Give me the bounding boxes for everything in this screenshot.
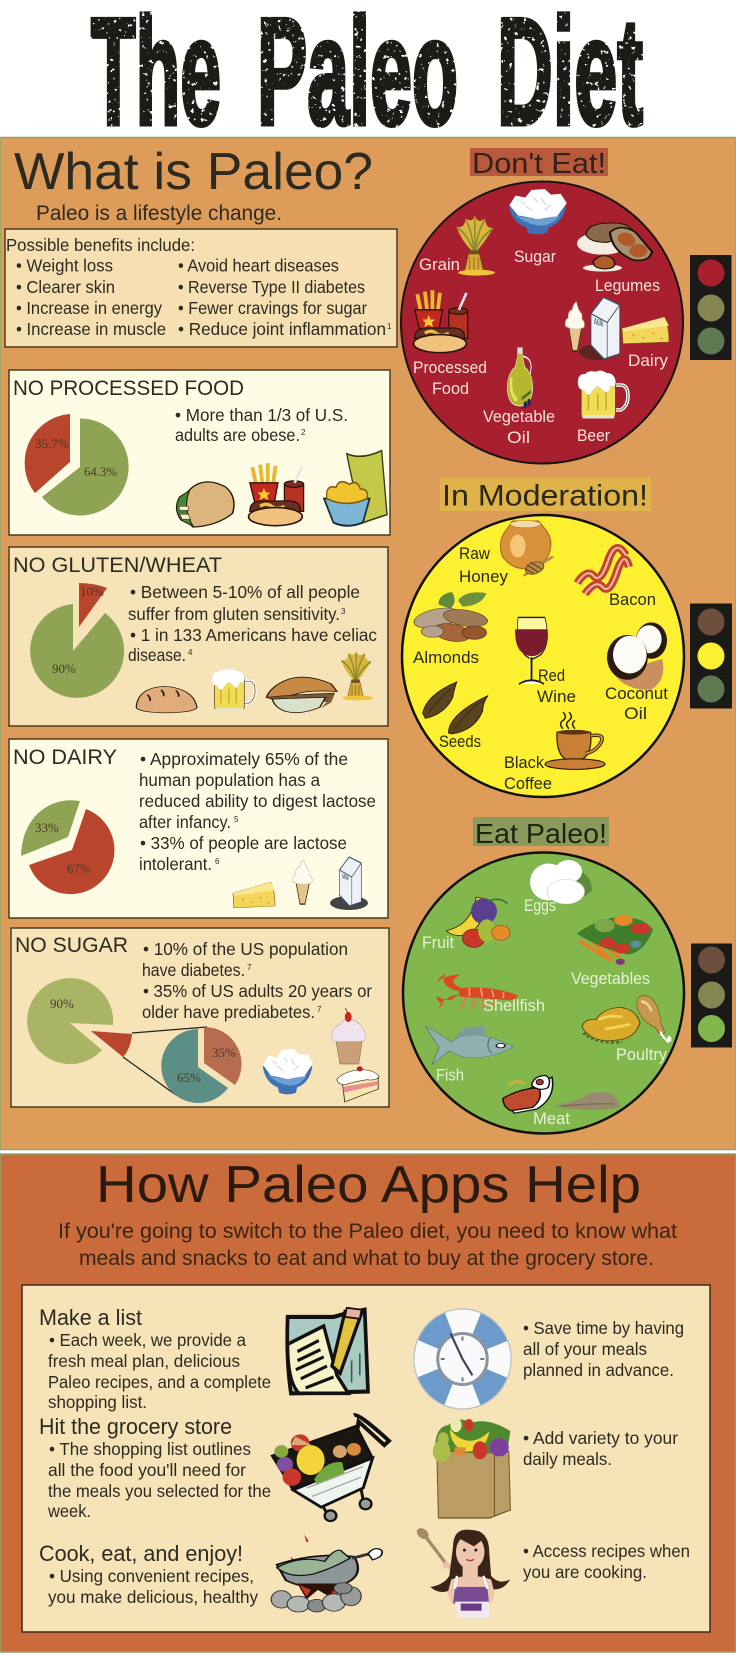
labels: don't eat foods: Vegetable (483, 407, 555, 426)
icon: roast (553, 1092, 620, 1110)
icon: steak (503, 1075, 553, 1113)
traffic light: yellow (690, 604, 732, 708)
pie chart: gluten (30, 583, 124, 698)
text: dairy stats: reduced ability to digest lactose (139, 791, 376, 811)
labels: moderation foods (413, 544, 668, 793)
icon: milk (330, 857, 368, 910)
labels: don't eat foods: Sugar (514, 247, 556, 266)
icon: honey pot (500, 521, 553, 577)
heading: no gluten wheat: NO GLUTEN/WHEAT (13, 554, 222, 577)
labels: paleo foods: Eggs (524, 896, 556, 915)
text: dairy stats: 5 (234, 815, 239, 824)
labels: don't eat foods: Grain (419, 255, 460, 274)
circle: don't eat foods (401, 182, 683, 464)
icon: sugar bowl (263, 1049, 313, 1094)
panel: possible benefits: • Fewer cravings for sugar (178, 298, 367, 318)
pie chart: dairy: 67% (67, 861, 91, 876)
text: gluten stats: 4 (188, 648, 193, 657)
text: gluten stats: • Between 5-10% of all people (130, 582, 360, 602)
panel: how paleo apps help (0, 1154, 736, 1652)
icon: legumes (577, 223, 652, 272)
circle: paleo foods (403, 852, 684, 1134)
icon: fast food (414, 290, 468, 353)
text: access recipes (523, 1541, 690, 1582)
pie chart: sugar: 35% (212, 1045, 236, 1060)
icon: fast food (249, 463, 304, 526)
step: cook, eat, and enjoy: you make delicious, healthy (48, 1587, 258, 1607)
icon: almonds (410, 592, 490, 645)
icon: coconut (607, 622, 667, 690)
icon: chips (324, 451, 387, 526)
labels: moderation foods: Coffee (504, 774, 552, 793)
text: add variety: • Add variety to your (523, 1428, 678, 1448)
icon: seeds (423, 682, 488, 734)
icon: pan over fire (271, 1535, 382, 1612)
panel: possible benefits: Possible benefits include: (6, 235, 195, 255)
text: obesity stat: • More than 1/3 of U.S. (175, 405, 348, 425)
labels: paleo foods: Shellfish (483, 996, 545, 1015)
icon: ice cream (292, 860, 312, 904)
step: hit the grocery store: week. (47, 1501, 91, 1521)
panel: possible benefits: • Avoid heart diseases (178, 256, 339, 276)
traffic light: green (691, 944, 732, 1048)
text: sugar stats: • 10% of the US population (143, 939, 348, 959)
text: gluten stats: suffer from gluten sensitivity. (128, 604, 340, 624)
heading: how paleo apps help: How Paleo Apps Help (96, 1156, 641, 1214)
panel: no sugar (11, 928, 389, 1107)
text: intro: If you're going to switch to the Paleo diet, you need to know what (58, 1220, 677, 1243)
heading: no dairy: NO DAIRY (13, 746, 117, 769)
text: add variety (523, 1428, 678, 1469)
step: make a list: • Each week, we provide a (49, 1330, 246, 1350)
panel: possible benefits: • Weight loss (16, 256, 113, 276)
text: gluten stats (128, 582, 377, 665)
text: add variety: daily meals. (523, 1449, 612, 1469)
icon: notepad and pencil (287, 1308, 368, 1393)
step: cook, eat, and enjoy: • Using convenient recipes, (49, 1566, 254, 1586)
labels: moderation foods: Bacon (609, 590, 656, 609)
panel: possible benefits: • Increase in energy (16, 298, 162, 318)
text: sugar stats: have diabetes. (142, 960, 245, 980)
labels: paleo foods: Meat (533, 1109, 570, 1128)
heading: in moderation: In Moderation! (442, 480, 648, 512)
pie chart: sugar (27, 978, 242, 1103)
icon: lobster (437, 973, 518, 1009)
icon: bacon (577, 548, 629, 594)
text: gluten stats: disease. (128, 645, 186, 665)
pie chart: sugar: 90% (50, 996, 74, 1011)
icon: chicken leg (637, 996, 671, 1043)
panel: possible benefits: • Clearer skin (16, 277, 115, 297)
icon: sugar bowl (509, 189, 567, 234)
heading: no processed food: NO PROCESSED FOOD (13, 377, 244, 400)
pie chart: sugar: 65% (177, 1070, 201, 1085)
icon: beer (578, 371, 628, 418)
labels: moderation foods: Honey (459, 567, 508, 586)
icon: life ring clock (414, 1309, 511, 1409)
step: hit the grocery store: all the food you'll need for (48, 1460, 246, 1480)
icon: shopping cart (272, 1415, 389, 1521)
labels: don't eat foods: Legumes (595, 276, 660, 295)
heading: don't eat: Don't Eat! (472, 148, 606, 180)
panel: no processed food (9, 370, 390, 535)
icon: oil (507, 348, 533, 408)
icon: coffee (545, 712, 605, 769)
icon: cake (337, 1066, 379, 1102)
step: hit the grocery store: Hit the grocery store (39, 1414, 232, 1439)
panel: possible benefits (5, 229, 397, 347)
labels: don't eat foods: Dairy (628, 351, 669, 370)
text: access recipes: • Access recipes when (523, 1541, 690, 1561)
icon: fruit (446, 897, 510, 947)
text: sugar stats: older have prediabetes. (142, 1002, 315, 1022)
panel: no dairy (9, 739, 388, 918)
step: hit the grocery store: the meals you selected for the (48, 1481, 271, 1501)
text: access recipes: you are cooking. (523, 1562, 647, 1582)
panel: possible benefits: • Reduce joint inflammation (178, 319, 386, 339)
step: make a list (39, 1305, 271, 1412)
labels: moderation foods: Raw (459, 544, 491, 563)
step: make a list: Paleo recipes, and a complete (48, 1372, 271, 1392)
labels: paleo foods: Fish (436, 1066, 464, 1084)
text: save time: • Save time by having (523, 1318, 684, 1338)
icon: vegetables (577, 915, 653, 965)
panel: possible benefits: • Reverse Type II diabetes (178, 277, 365, 297)
text: dairy stats: human population has a (139, 770, 320, 790)
text: obesity stat (175, 405, 348, 445)
labels: don't eat foods: Food (432, 379, 469, 398)
step: hit the grocery store (39, 1414, 271, 1521)
text: lifestyle change: Paleo is a lifestyle change. (36, 202, 282, 225)
text: sugar stats: 7 (317, 1005, 322, 1014)
icon: wine glass (515, 617, 547, 684)
text: save time: planned in advance. (523, 1360, 674, 1380)
text: dairy stats (139, 749, 376, 874)
icon: taco (176, 482, 234, 527)
text: save time: all of your meals (523, 1339, 647, 1359)
labels: don't eat foods (413, 247, 669, 447)
icon: cupcake (332, 1008, 366, 1064)
text: sugar stats: • 35% of US adults 20 years or (143, 981, 372, 1001)
labels: moderation foods: Almonds (413, 648, 479, 667)
step: make a list: fresh meal plan, delicious (48, 1351, 240, 1371)
labels: moderation foods: Wine (537, 687, 576, 706)
step: make a list: Make a list (39, 1305, 142, 1330)
labels: don't eat foods: Beer (577, 426, 610, 445)
pie chart: dairy (21, 800, 114, 894)
pie chart: gluten: 10% (80, 584, 104, 599)
labels: paleo foods (422, 896, 667, 1128)
text: intro: meals and snacks to eat and what to buy at the grocery store. (79, 1247, 654, 1270)
pie chart: processed food: 35.7% (35, 436, 69, 451)
heading: what is paleo: What is Paleo? (14, 143, 373, 201)
traffic light: red (690, 255, 732, 360)
text: dairy stats: intolerant. (139, 854, 212, 874)
labels: moderation foods: Oil (624, 704, 647, 723)
labels: moderation foods: Seeds (439, 732, 481, 751)
labels: paleo foods: Poultry (616, 1045, 667, 1064)
icon: fish (425, 1026, 513, 1065)
panel: how it works (22, 1285, 710, 1632)
labels: moderation foods: Coconut (605, 684, 668, 703)
text: gluten stats: 3 (341, 607, 346, 616)
icon: woman cooking (415, 1526, 510, 1618)
panel: possible benefits: 1 (387, 322, 392, 331)
panel: no gluten wheat (9, 547, 388, 726)
labels: paleo foods: Fruit (422, 933, 454, 952)
icon: wheat (341, 651, 373, 700)
text: gluten stats: • 1 in 133 Americans have celiac (130, 625, 377, 645)
icon: dairy (565, 297, 669, 360)
icon: chicken (582, 1007, 640, 1042)
text: dairy stats: 6 (215, 857, 220, 866)
step: cook, eat, and enjoy (39, 1541, 258, 1607)
labels: moderation foods: Red (538, 666, 565, 685)
icon: grocery bag (433, 1418, 510, 1518)
icon: beer (212, 669, 255, 711)
icon: cheese (233, 882, 275, 908)
pie chart: processed food (25, 414, 129, 515)
labels: don't eat foods: Oil (507, 428, 530, 447)
icon: bread (136, 686, 197, 713)
text: sugar stats: 7 (247, 963, 252, 972)
text: sugar stats (142, 939, 372, 1022)
panel: possible benefits: • Increase in muscle (16, 319, 166, 339)
circle: moderation foods (402, 515, 684, 797)
pie chart: processed food: 64.3% (84, 464, 117, 479)
heading: no sugar: NO SUGAR (15, 934, 128, 957)
text: dairy stats: • Approximately 65% of the (140, 749, 348, 769)
text: intro (58, 1220, 677, 1270)
icon: sandwich (266, 677, 337, 713)
text: obesity stat: 2 (301, 428, 306, 437)
text: obesity stat: adults are obese. (175, 425, 300, 445)
icon: eggs (530, 860, 592, 904)
icon: grain (456, 216, 495, 276)
text: dairy stats: after infancy. (139, 812, 231, 832)
title (0, 0, 736, 157)
labels: don't eat foods: Processed (413, 358, 487, 377)
step: hit the grocery store: • The shopping list outlines (49, 1439, 251, 1459)
text: save time (523, 1318, 684, 1380)
labels: moderation foods: Black (504, 753, 544, 772)
labels: paleo foods: Vegetables (571, 969, 650, 988)
pie chart: dairy: 33% (35, 820, 59, 835)
text: dairy stats: • 33% of people are lactose (140, 833, 347, 853)
step: cook, eat, and enjoy: Cook, eat, and enjoy! (39, 1541, 243, 1566)
step: make a list: shopping list. (48, 1392, 147, 1412)
pie chart: gluten: 90% (52, 661, 76, 676)
heading: eat paleo: Eat Paleo! (475, 818, 607, 849)
panel: what is paleo (0, 138, 736, 1150)
